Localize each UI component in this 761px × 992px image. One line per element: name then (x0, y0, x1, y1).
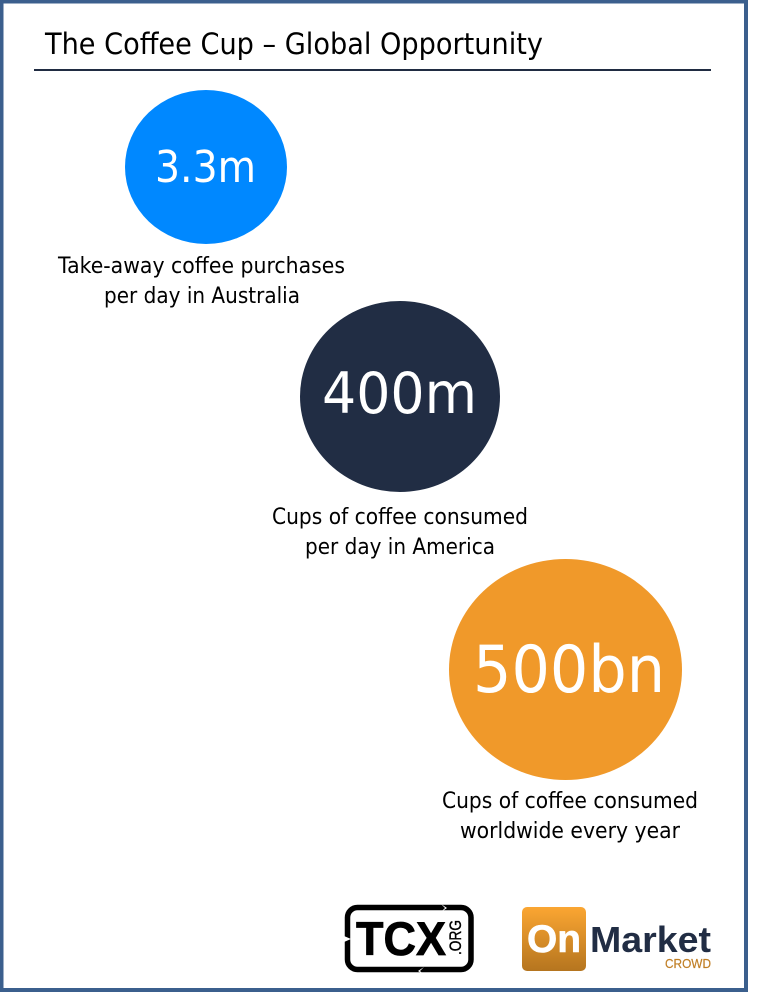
circle: blue (125, 90, 287, 244)
value: 400m: 400m (322, 361, 477, 427)
circle: orange (449, 559, 682, 780)
logo frame (348, 908, 471, 970)
value: 3.3m: 3.3m (155, 142, 256, 193)
caption: Australia (57, 253, 345, 309)
title underline (34, 69, 711, 71)
caption: Australia: per day in Australia (104, 283, 300, 309)
caption: America: per day in America (305, 534, 495, 560)
caption: America (272, 504, 528, 560)
logo tile (522, 907, 586, 971)
logo: TCX.ORG (344, 904, 471, 975)
title: The Coffee Cup – Global Opportunity (44, 27, 543, 61)
caption: worldwide: Cups of coffee consumed (442, 788, 698, 814)
caption: America: Cups of coffee consumed (272, 504, 528, 530)
caption: worldwide: worldwide every year (460, 818, 681, 844)
logo frame notches (344, 904, 447, 975)
logo word: On: On (527, 918, 581, 961)
caption: worldwide (442, 788, 698, 844)
logo wordmark: TCX (356, 912, 446, 965)
logo word: Market: Market (590, 919, 711, 960)
stat: 500bn (442, 559, 698, 844)
stat: 400m (272, 301, 528, 560)
caption: Australia: Take-away coffee purchases (57, 253, 345, 279)
circle: navy (300, 301, 500, 492)
logo: OnMarket Crowd (522, 907, 711, 971)
stat: 3.3m (57, 90, 345, 309)
value: 500bn: 500bn (473, 633, 665, 708)
logo suffix: .ORG (446, 920, 465, 955)
logo word: Crowd: CROWD (665, 957, 711, 971)
